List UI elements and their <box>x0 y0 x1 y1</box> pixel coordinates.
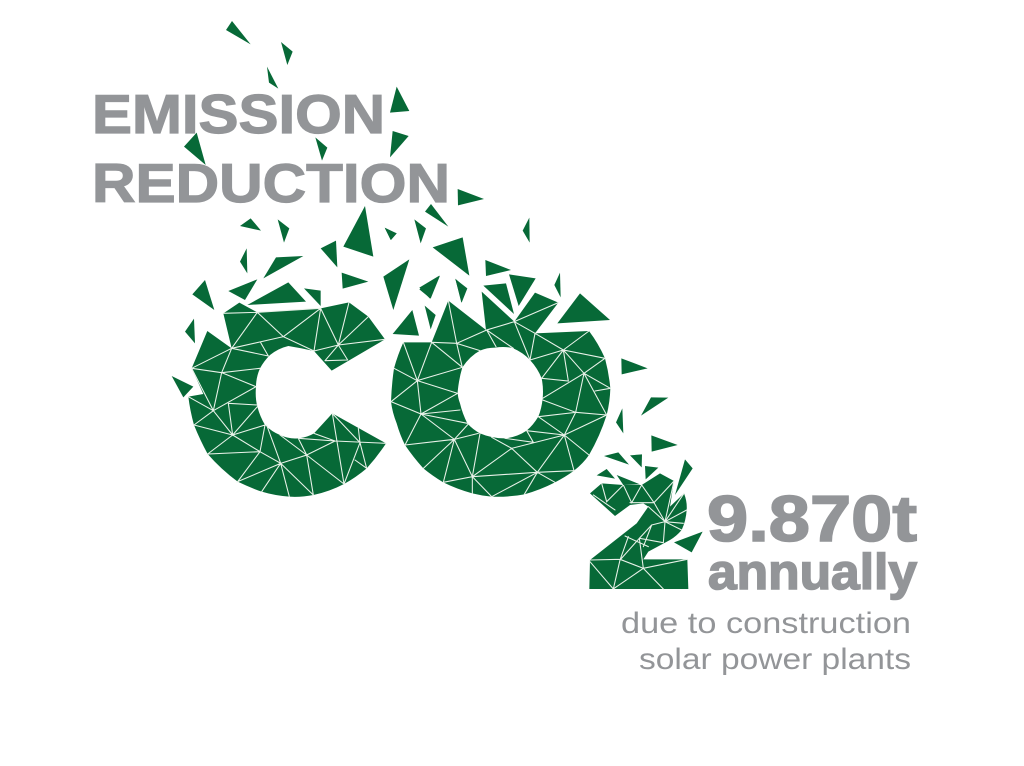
numeral 2 with triangulated mesh <box>589 473 688 589</box>
figure: 9.870t annually <box>707 482 917 600</box>
shards around the numeral 2 <box>597 358 703 552</box>
shards right of the title above the O <box>385 218 610 336</box>
title: emission reduction <box>92 83 450 214</box>
description text <box>621 607 911 676</box>
figure: 9.870t annually: annually <box>708 544 917 600</box>
title: emission reduction: EMISSION <box>92 83 385 145</box>
title: emission reduction: REDUCTION <box>92 152 450 214</box>
description text: solar power plants <box>639 643 911 676</box>
shards left of the C <box>172 319 195 397</box>
figure: 9.870t annually: 9.870t <box>707 482 917 555</box>
letter C with triangulated mesh <box>188 302 386 497</box>
letter O with triangulated mesh <box>391 292 610 497</box>
flying shards above the C and O <box>184 21 484 310</box>
description text: due to construction <box>621 607 911 640</box>
